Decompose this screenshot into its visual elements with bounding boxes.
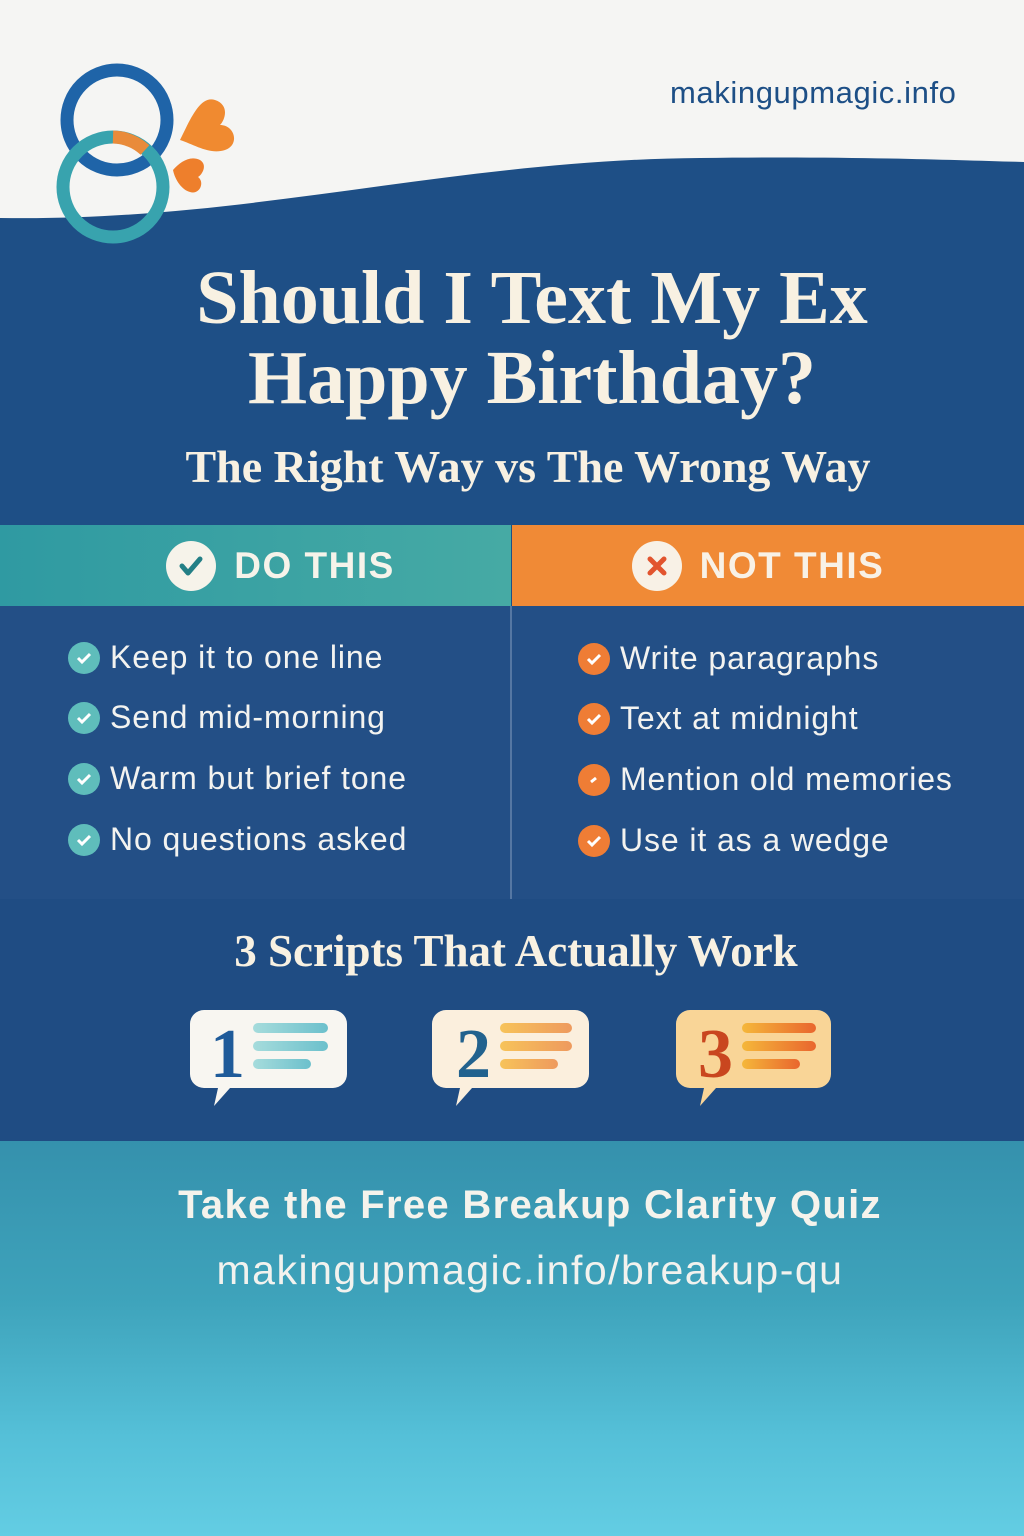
logo <box>56 64 234 244</box>
list: not this: Mention old memories <box>620 761 953 797</box>
title <box>196 256 868 420</box>
bubble 3 <box>676 1010 831 1106</box>
list: do this: Warm but brief tone <box>110 760 407 796</box>
panel: quiz CTA <box>0 1141 1024 1536</box>
list: do this: Keep it to one line <box>110 639 383 675</box>
panel: do this header: DO THIS <box>234 544 395 586</box>
panel: do this header <box>0 525 511 606</box>
CTA url: makingupmagic.info/breakup-qu <box>217 1247 843 1293</box>
list: not this: Use it as a wedge <box>620 822 890 858</box>
CTA heading: Take the Free Breakup Clarity Quiz <box>178 1183 882 1227</box>
panel: not this header: NOT THIS <box>700 544 884 586</box>
panel: not this header <box>512 525 1024 606</box>
list: do this <box>68 639 407 857</box>
icon: x <box>632 540 682 590</box>
bubble 2 <box>432 1010 589 1106</box>
panel: scripts <box>0 899 1024 1141</box>
bubble 3: 3 <box>698 1016 733 1093</box>
bubbles <box>190 1010 831 1106</box>
title: Happy Birthday? <box>248 336 816 420</box>
header wave background <box>0 158 1024 606</box>
title: Should I Text My Ex <box>196 256 868 340</box>
panel: lists <box>0 606 1024 899</box>
list: do this: No questions asked <box>110 821 407 857</box>
list: not this: Text at midnight <box>620 700 859 736</box>
bubble 1 <box>190 1010 347 1106</box>
subtitle: The Right Way vs The Wrong Way <box>185 441 871 492</box>
list: do this: Send mid-morning <box>110 699 386 735</box>
website url: makingupmagic.info <box>670 75 957 110</box>
bubble 2: 2 <box>456 1016 491 1093</box>
bubble 1: 1 <box>210 1016 245 1093</box>
list: not this <box>578 640 953 858</box>
list: not this: Write paragraphs <box>620 640 879 676</box>
icon: check <box>166 540 216 590</box>
scripts heading: 3 Scripts That Actually Work <box>234 926 798 976</box>
